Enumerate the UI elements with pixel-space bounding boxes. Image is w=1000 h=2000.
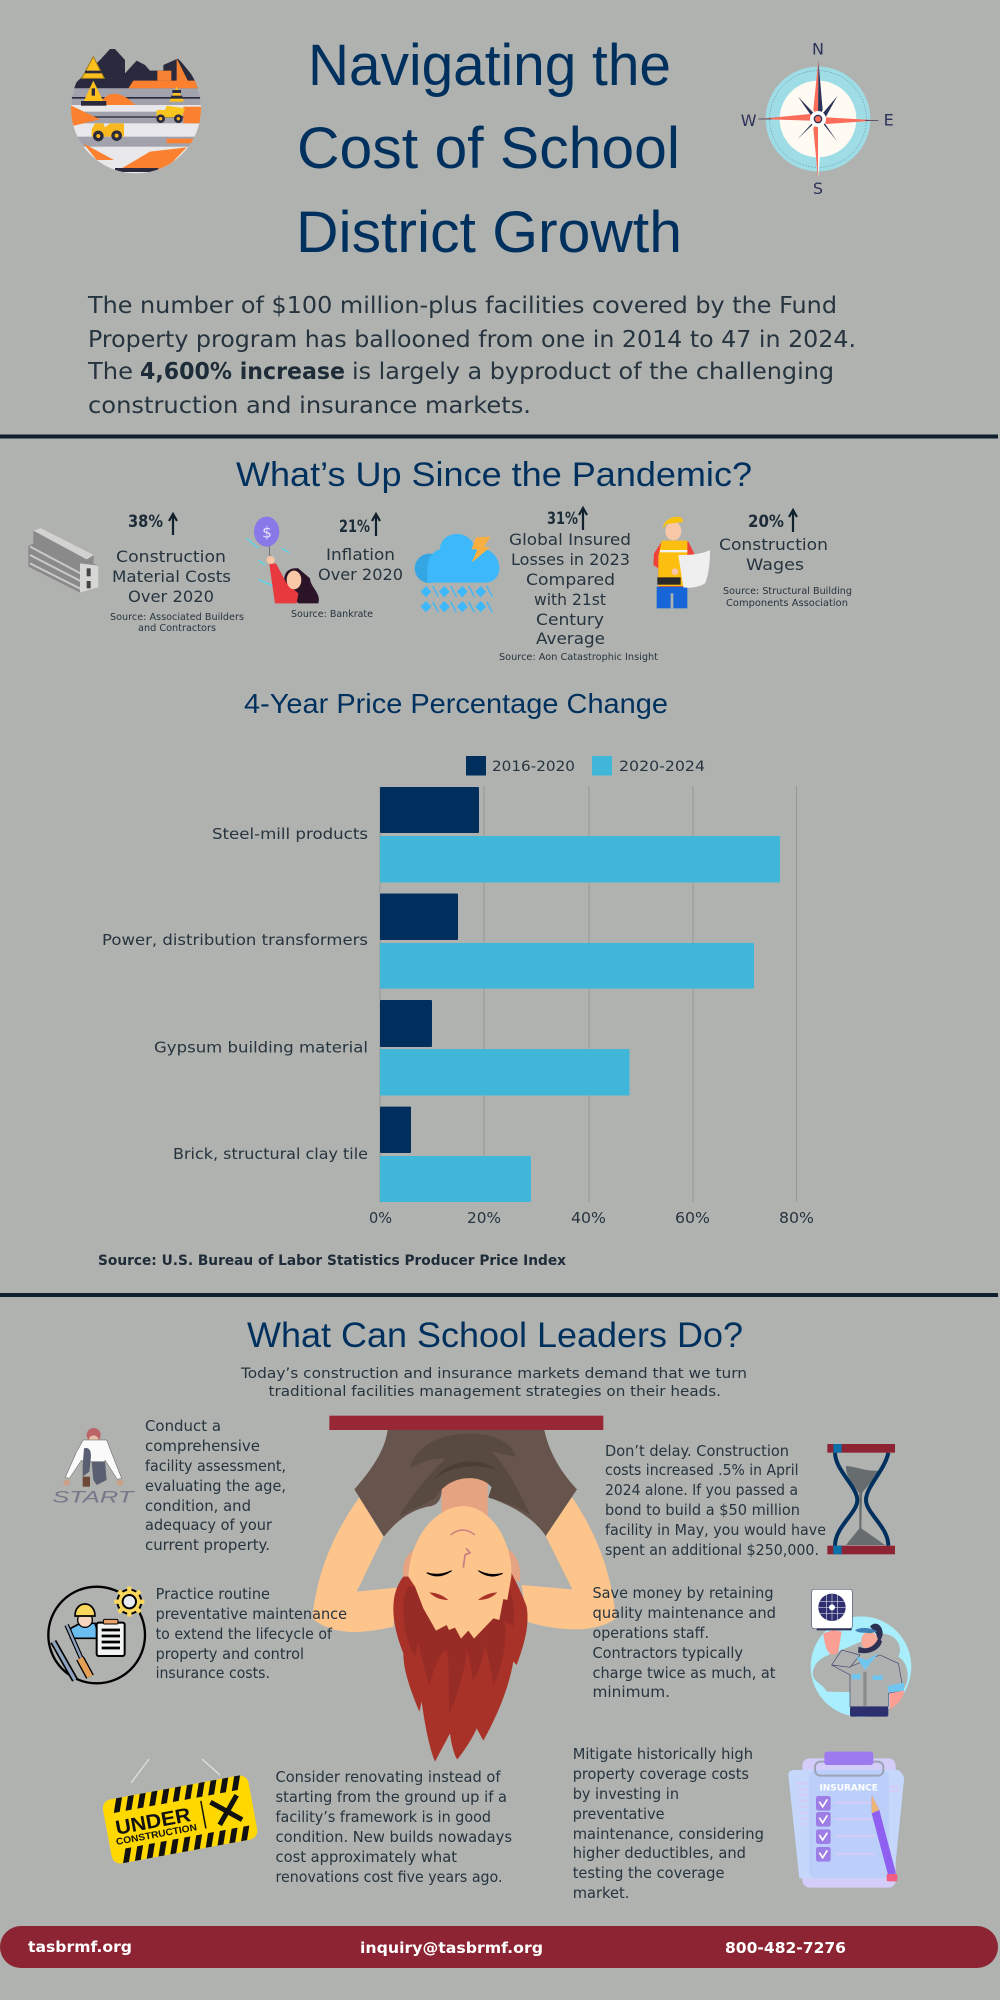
illustration: upside-down person [312, 1416, 616, 1762]
x axis labels: 60% [675, 1209, 710, 1227]
icon: woman with balloon: $ [262, 524, 272, 542]
text: retain staff: Contractors typically [592, 1644, 743, 1662]
stat: construction material costs: Material Costs [112, 567, 231, 586]
icon: runner at start: START [52, 1488, 136, 1507]
text: mitigate coverage costs: higher deductibles, and [573, 1844, 746, 1862]
stat: construction material costs: Construction [116, 547, 226, 566]
footer bar: 800-482-7276 [725, 1939, 846, 1957]
title [296, 33, 682, 265]
icon: compass [741, 39, 894, 198]
stat: global insured losses: Global Insured [509, 530, 631, 549]
x axis labels: 40% [571, 1209, 606, 1227]
stat: inflation: Source: Bankrate [291, 609, 373, 620]
bar chart [102, 756, 814, 1227]
heading: what's up: What’s Up Since the Pandemic? [236, 456, 752, 494]
text: retain staff: minimum. [592, 1683, 670, 1701]
text: mitigate coverage costs: maintenance, considering [573, 1825, 764, 1843]
text: routine maintenance: property and control [156, 1645, 304, 1663]
intro paragraph: 4,600% increase [140, 359, 345, 385]
stat: construction wages: Construction [719, 535, 828, 554]
icon: woman with balloon [247, 517, 319, 603]
text: retain staff: charge twice as much, at [592, 1664, 776, 1682]
icon: worker with gear [48, 1587, 145, 1683]
icon: steel beams [28, 528, 98, 593]
stat: construction wages: 20% [748, 512, 784, 532]
icon: under construction sign: UNDER [114, 1804, 193, 1840]
footer bar [0, 1926, 998, 1968]
text: retain staff [592, 1584, 776, 1701]
text: routine maintenance [156, 1585, 347, 1682]
text: mitigate coverage costs: testing the coverage [573, 1864, 724, 1882]
icon: insurance clipboard: INSURANCE [819, 1784, 878, 1794]
section intro: traditional facilities management strategies on their heads. [268, 1384, 721, 1400]
text: don't delay: costs increased .5% in April [605, 1461, 798, 1479]
text: renovate: condition. New builds nowadays [276, 1828, 512, 1846]
text: routine maintenance: preventative maintenance [156, 1605, 347, 1623]
intro paragraph: The [87, 359, 133, 385]
stat: inflation: Over 2020 [318, 565, 403, 584]
stat: construction wages: Wages [746, 555, 804, 574]
text: retain staff: operations staff. [592, 1624, 709, 1642]
icon: insurance clipboard [788, 1752, 904, 1888]
stat: construction material costs: 38% [128, 512, 163, 532]
bars: brick, structural clay tile: Brick, structural clay tile [173, 1145, 368, 1163]
stat: global insured losses: 31% [547, 509, 578, 529]
icon: technician holding air conditioner [811, 1589, 911, 1717]
icon: under construction sign [101, 1759, 259, 1865]
stat: construction material costs: and Contractors [138, 623, 216, 634]
text: don't delay: spent an additional $250,000. [605, 1541, 819, 1559]
chart source: Source: U.S. Bureau of Labor Statistics Producer Price Index [98, 1253, 567, 1269]
text: facility assessment: evaluating the age, [145, 1477, 286, 1495]
text: renovate: cost approximately what [276, 1848, 457, 1866]
stat: construction material costs: Source: Associated Builders [110, 612, 244, 623]
text: facility assessment: adequacy of your [145, 1516, 273, 1534]
text: don't delay: facility in May, you would have [605, 1521, 826, 1539]
intro paragraph: The number of $100 million-plus facilities covered by the Fund [87, 293, 837, 319]
bars: steel-mill products [212, 787, 780, 882]
text: don't delay: bond to build a $50 million [605, 1501, 800, 1519]
stat: inflation: 21% [339, 517, 370, 537]
footer bar: inquiry@tasbrmf.org [360, 1939, 543, 1957]
chart heading: 4-Year Price Percentage Change [244, 688, 668, 719]
icon: compass: W [741, 111, 757, 130]
legend [466, 756, 705, 776]
arrow up [372, 514, 380, 536]
icon: hourglass [827, 1444, 895, 1554]
text: renovate: renovations cost five years ago. [276, 1868, 502, 1886]
intro paragraph: is largely a byproduct of the challenging [352, 359, 834, 385]
text: facility assessment: facility assessment, [145, 1457, 286, 1475]
legend: 2016-2020 [492, 759, 575, 775]
bars: gypsum building material: Gypsum building material [154, 1039, 368, 1057]
bars: steel-mill products: Steel-mill products [212, 825, 368, 843]
stat: construction wages: Source: Structural Building [723, 586, 852, 597]
stat: construction wages: Components Association [726, 598, 848, 609]
text: don't delay: Don’t delay. Construction [605, 1442, 789, 1460]
title: District Growth [296, 200, 682, 265]
stat: global insured losses [499, 508, 658, 663]
text: renovate: starting from the ground up if a [276, 1788, 507, 1806]
text: facility assessment: comprehensive [145, 1437, 260, 1455]
bars: power, distribution transformers [102, 894, 754, 989]
arrow up [579, 508, 587, 530]
stat: construction material costs [110, 512, 244, 634]
bars: brick, structural clay tile [173, 1107, 531, 1202]
stat: global insured losses: Losses in 2023 [511, 550, 630, 569]
stat: inflation [291, 514, 403, 620]
stat: global insured losses: with 21st [534, 590, 606, 609]
heading: what can school leaders do: What Can School Leaders Do? [247, 1316, 743, 1355]
bars: power, distribution transformers: Power, distribution transformers [102, 931, 368, 949]
section intro [240, 1366, 747, 1400]
footer bar: tasbrmf.org [28, 1938, 132, 1956]
text: retain staff: Save money by retaining [592, 1584, 774, 1602]
text: mitigate coverage costs: property coverage costs [573, 1765, 749, 1783]
text: routine maintenance: Practice routine [156, 1585, 270, 1603]
text: renovate: facility’s framework is in good [276, 1808, 491, 1826]
text: mitigate coverage costs: market. [573, 1884, 630, 1902]
intro paragraph: Property program has ballooned from one in 2014 to 47 in 2024. [88, 327, 856, 353]
bars: gypsum building material [154, 1000, 630, 1096]
intro paragraph: construction and insurance markets. [88, 393, 531, 419]
icon: construction site circle [70, 49, 203, 173]
arrow up [169, 514, 177, 535]
stat: global insured losses: Century [536, 610, 604, 629]
section intro: Today’s construction and insurance markets demand that we turn [240, 1366, 747, 1382]
stat: global insured losses: Compared [526, 570, 615, 589]
text: renovate [276, 1768, 512, 1886]
stat: construction wages [719, 510, 852, 609]
text: mitigate coverage costs [573, 1745, 764, 1902]
text: don't delay [605, 1442, 826, 1559]
text: facility assessment [145, 1417, 286, 1554]
text: facility assessment: current property. [145, 1536, 270, 1554]
title: Navigating the [308, 33, 671, 98]
icon: compass: S [813, 179, 823, 198]
text: facility assessment: condition, and [145, 1497, 251, 1515]
text: routine maintenance: to extend the lifecycle of [156, 1625, 333, 1643]
x axis labels [369, 1209, 814, 1227]
icon: storm cloud [415, 534, 499, 612]
icon: under construction sign: CONSTRUCTION [115, 1822, 198, 1848]
text: mitigate coverage costs: by investing in [573, 1785, 679, 1803]
intro paragraph [87, 293, 856, 419]
icon: compass: N [812, 39, 824, 58]
text: retain staff: quality maintenance and [592, 1604, 776, 1622]
stat: construction material costs: Over 2020 [128, 587, 214, 606]
text: facility assessment: Conduct a [145, 1417, 221, 1435]
stat: inflation: Inflation [326, 545, 395, 564]
x axis labels: 20% [467, 1209, 501, 1227]
stat: global insured losses: Source: Aon Catastrophic Insight [499, 652, 658, 663]
text: mitigate coverage costs: Mitigate historically high [573, 1745, 753, 1763]
x axis labels: 0% [369, 1209, 392, 1227]
legend: 2020-2024 [619, 759, 705, 775]
text: mitigate coverage costs: preventative [573, 1805, 664, 1823]
icon: runner at start [52, 1428, 136, 1507]
icon: compass: E [884, 111, 894, 130]
text: renovate: Consider renovating instead of [276, 1768, 501, 1786]
x axis labels: 80% [779, 1209, 814, 1227]
stat: global insured losses: Average [536, 629, 605, 648]
title: Cost of School [297, 116, 680, 181]
icon: construction worker with plans [653, 517, 710, 608]
text: don't delay: 2024 alone. If you passed a [605, 1481, 798, 1499]
text: routine maintenance: insurance costs. [156, 1664, 270, 1682]
arrow up [789, 510, 797, 532]
